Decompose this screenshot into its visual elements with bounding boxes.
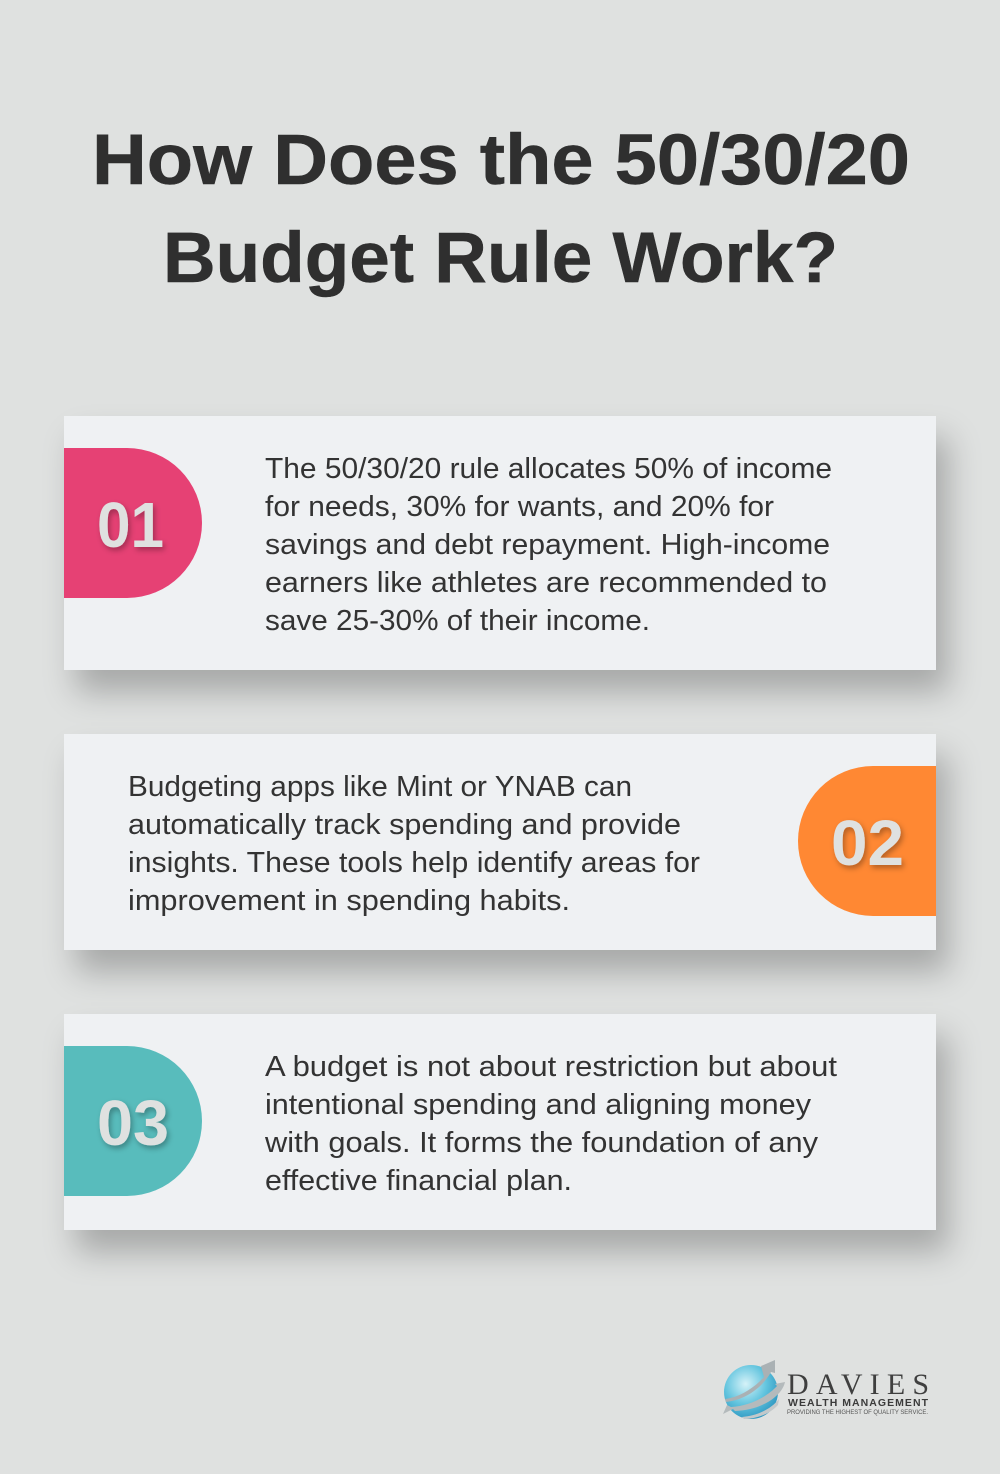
logo: Davies Wealth Management	[723, 1360, 929, 1419]
text: step 02 description: Budgeting apps like Mint or YNAB can	[128, 771, 632, 803]
text: step 02 description: insights. These tools help identify areas for	[128, 847, 700, 879]
panel: step 01	[64, 416, 936, 670]
text: step 02 description: improvement in spending habits.	[128, 885, 570, 917]
panel: step 02	[64, 734, 936, 950]
text: step 01 description: savings and debt repayment. High-income	[265, 529, 830, 561]
text: step 03 description: A budget is not about restriction but about	[265, 1051, 837, 1083]
text: step 03 description: effective financial plan.	[265, 1165, 572, 1197]
title: How Does the 50/30/20	[92, 121, 910, 200]
badge: 03	[64, 1046, 202, 1196]
badge: 01: 01	[97, 489, 164, 561]
badge: 02: 02	[831, 807, 904, 879]
text: step 01 description	[265, 453, 832, 637]
text: step 03 description: intentional spending and aligning money	[265, 1089, 812, 1121]
text: company name	[787, 1368, 929, 1416]
text: step 01 description: earners like athletes are recommended to	[265, 567, 827, 599]
text: step 01 description: save 25-30% of their income.	[265, 605, 650, 637]
text: company name: WEALTH MANAGEMENT	[788, 1397, 929, 1409]
badge: 01	[64, 448, 202, 598]
text: step 02 description	[128, 771, 700, 917]
title	[92, 121, 910, 298]
icon: globe with arrows	[723, 1360, 785, 1419]
text: step 01 description: The 50/30/20 rule allocates 50% of income	[265, 453, 832, 485]
title: Budget Rule Work?	[163, 219, 838, 298]
badge: 03: 03	[97, 1087, 169, 1159]
panel: step 03	[64, 1014, 936, 1230]
text: step 03 description	[264, 1051, 837, 1197]
text: company name: DAVIES	[787, 1368, 929, 1401]
text: step 03 description: with goals. It forms the foundation of any	[264, 1127, 819, 1159]
text: step 01 description: for needs, 30% for wants, and 20% for	[265, 491, 774, 523]
badge: 02	[798, 766, 936, 916]
text: step 02 description: automatically track spending and provide	[128, 809, 681, 841]
text: company name: PROVIDING THE HIGHEST OF QUALITY SERVICE.	[787, 1409, 928, 1416]
